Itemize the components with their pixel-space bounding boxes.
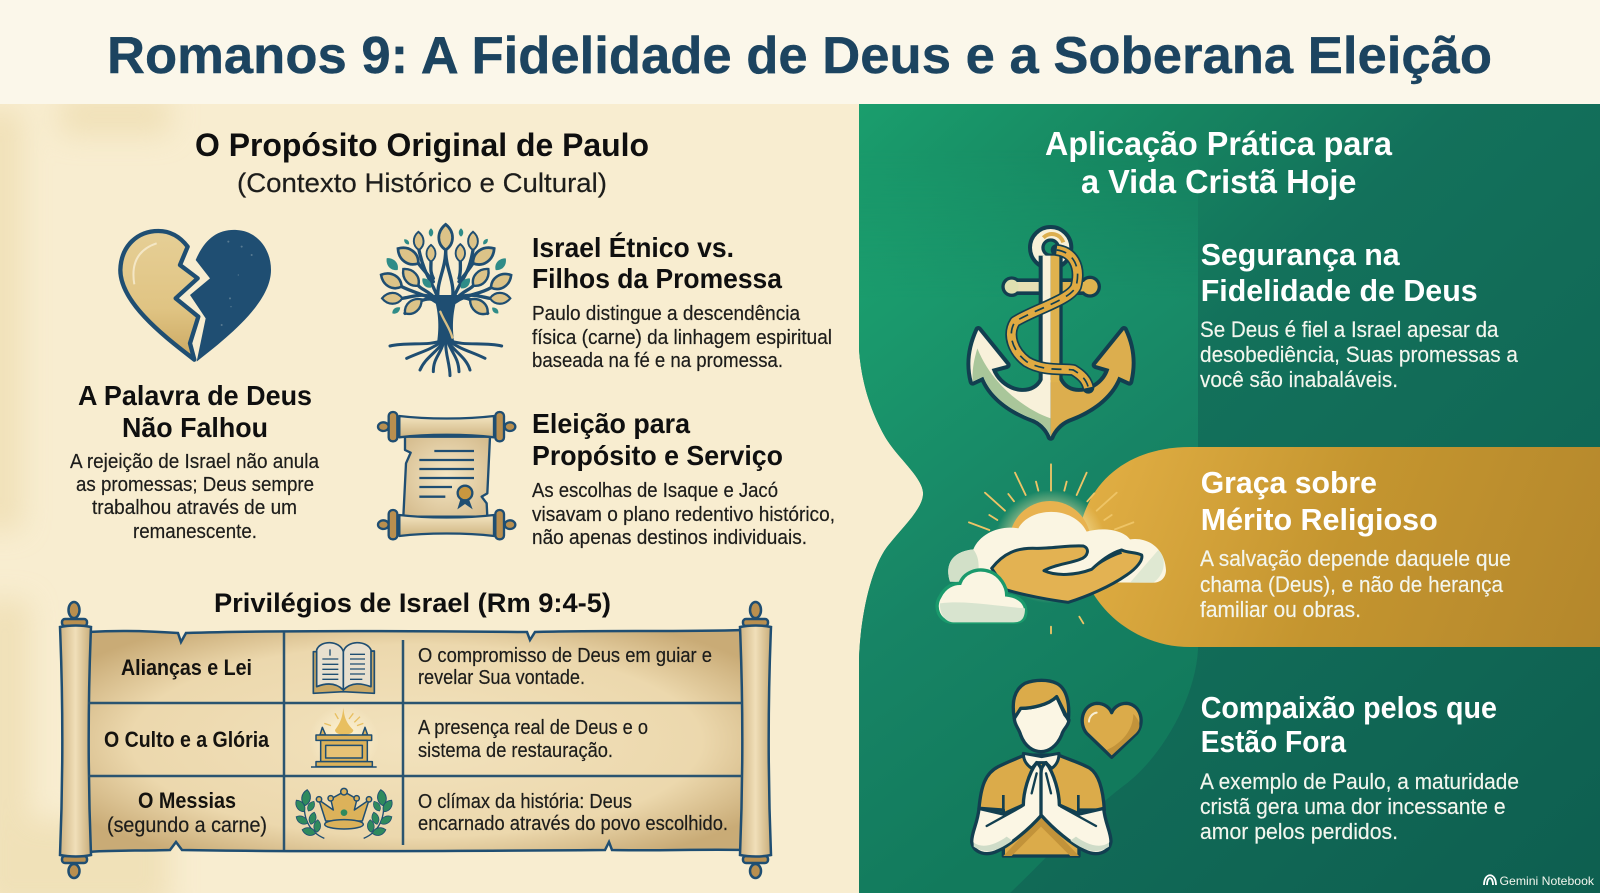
title band: Romanos 9: A Fidelidade de Deus e a Soberana Eleição	[107, 27, 1492, 85]
icon: open book	[313, 643, 374, 693]
left heading: (Contexto Histórico e Cultural)	[237, 168, 607, 198]
icon: anchor with chain	[970, 234, 1132, 437]
block: Segurança: Se Deus é fiel a Israel apesar da	[1200, 317, 1499, 342]
block: Israel Étnico: Filhos da Promessa	[532, 263, 782, 294]
block: Israel Étnico	[532, 232, 832, 372]
right heading: a Vida Cristã Hoje	[1081, 163, 1356, 200]
block: Graça sobre Mérito: Graça sobre	[1201, 465, 1377, 500]
icon: broken heart	[120, 230, 271, 362]
icon: altar with flame	[309, 705, 379, 775]
watermark: Gemini Notebook: Gemini Notebook	[1500, 874, 1595, 888]
block: Compaixão: A exemplo de Paulo, a maturidade	[1200, 769, 1519, 794]
block: Graça sobre Mérito	[1200, 465, 1511, 622]
panel: practical application	[859, 104, 1600, 893]
block: Eleição para Propósito	[532, 408, 835, 549]
row: O Messias	[107, 788, 728, 838]
row: Alianças e Lei: O compromisso de Deus em guiar e	[418, 645, 712, 667]
block: Israel Étnico: Israel Étnico vs.	[532, 232, 734, 263]
block: Israel Étnico: física (carne) da linhagem espiritual	[532, 327, 832, 349]
row: O Culto e a Glória: sistema de restauração.	[418, 740, 613, 762]
block: A Palavra de Deus Não Falhou	[70, 380, 320, 543]
icon: crown and laurel	[293, 788, 395, 838]
block: Compaixão: amor pelos perdidos.	[1200, 819, 1398, 844]
scroll rollers	[60, 602, 771, 878]
row: Alianças e Lei: revelar Sua vontade.	[418, 667, 585, 689]
block: Graça sobre Mérito: familiar ou obras.	[1200, 597, 1361, 622]
block: A Palavra de Deus Não Falhou: trabalhou através de um	[92, 497, 297, 519]
row: O Culto e a Glória	[104, 705, 648, 775]
row: O Messias: (segundo a carne)	[107, 814, 267, 837]
icon: hand, clouds and sun	[937, 464, 1166, 633]
block: Israel Étnico: Paulo distingue a descendência	[532, 303, 801, 325]
row: O Culto e a Glória: A presença real de Deus e o	[418, 717, 648, 739]
right heading: Aplicação Prática para	[1045, 125, 1393, 162]
block: Segurança: Fidelidade de Deus	[1201, 273, 1478, 308]
icon: tree with roots	[378, 224, 515, 376]
row: O Messias: O Messias	[138, 788, 236, 813]
block: Eleição para Propósito: não apenas destinos individuais.	[532, 527, 807, 549]
block: Graça sobre Mérito: A salvação depende daquele que	[1200, 546, 1511, 571]
block: Eleição para Propósito: Eleição para	[532, 408, 690, 439]
block: Eleição para Propósito: As escolhas de Isaque e Jacó	[532, 480, 778, 502]
block: Compaixão: Compaixão pelos que	[1201, 690, 1497, 725]
block: Compaixão: Estão Fora	[1201, 724, 1347, 759]
block: Eleição para Propósito: visavam o plano redentivo histórico,	[532, 504, 835, 526]
block: Compaixão	[1200, 690, 1519, 844]
block: A Palavra de Deus Não Falhou: as promessas; Deus sempre	[76, 474, 314, 496]
block: A Palavra de Deus Não Falhou: remanescente.	[133, 521, 257, 543]
scroll parchment	[88, 630, 745, 852]
block: Graça sobre Mérito: chama (Deus), e não de herança	[1200, 572, 1504, 597]
title band	[0, 0, 1600, 104]
paper stains	[0, 95, 170, 893]
block: A Palavra de Deus Não Falhou: Não Falhou	[122, 412, 268, 443]
block: Segurança	[1200, 237, 1519, 392]
block: Segurança: Segurança na	[1201, 237, 1400, 272]
row: Alianças e Lei	[121, 643, 712, 693]
table heading: Privilégios de Israel (Rm 9:4-5)	[214, 588, 611, 618]
block: Eleição para Propósito: Propósito e Serviço	[532, 440, 783, 471]
block: Segurança: você são inabaláveis.	[1200, 367, 1398, 392]
block: A Palavra de Deus Não Falhou: A Palavra de Deus	[78, 380, 312, 411]
row: Alianças e Lei: Alianças e Lei	[121, 655, 252, 680]
left heading: O Propósito Original de Paulo	[195, 127, 649, 163]
block: Segurança: desobediência, Suas promessas a	[1200, 342, 1519, 367]
row: O Messias: encarnado através do povo escolhido.	[418, 813, 728, 835]
icon: parchment scroll with seal	[378, 412, 515, 539]
block: Graça sobre Mérito: Mérito Religioso	[1201, 502, 1438, 537]
block: Compaixão: cristã gera uma dor incessante e	[1200, 794, 1506, 819]
block: A Palavra de Deus Não Falhou: A rejeição de Israel não anula	[70, 451, 320, 473]
table: privileges scroll	[60, 602, 771, 878]
block: Israel Étnico: baseada na fé e na promessa.	[532, 350, 783, 372]
row: O Messias: O clímax da história: Deus	[418, 791, 632, 813]
table grid	[88, 632, 742, 850]
left heading	[195, 127, 649, 198]
right heading	[1045, 125, 1393, 200]
icon: praying person with heart	[972, 680, 1141, 856]
row: O Culto e a Glória: O Culto e a Glória	[104, 727, 270, 752]
